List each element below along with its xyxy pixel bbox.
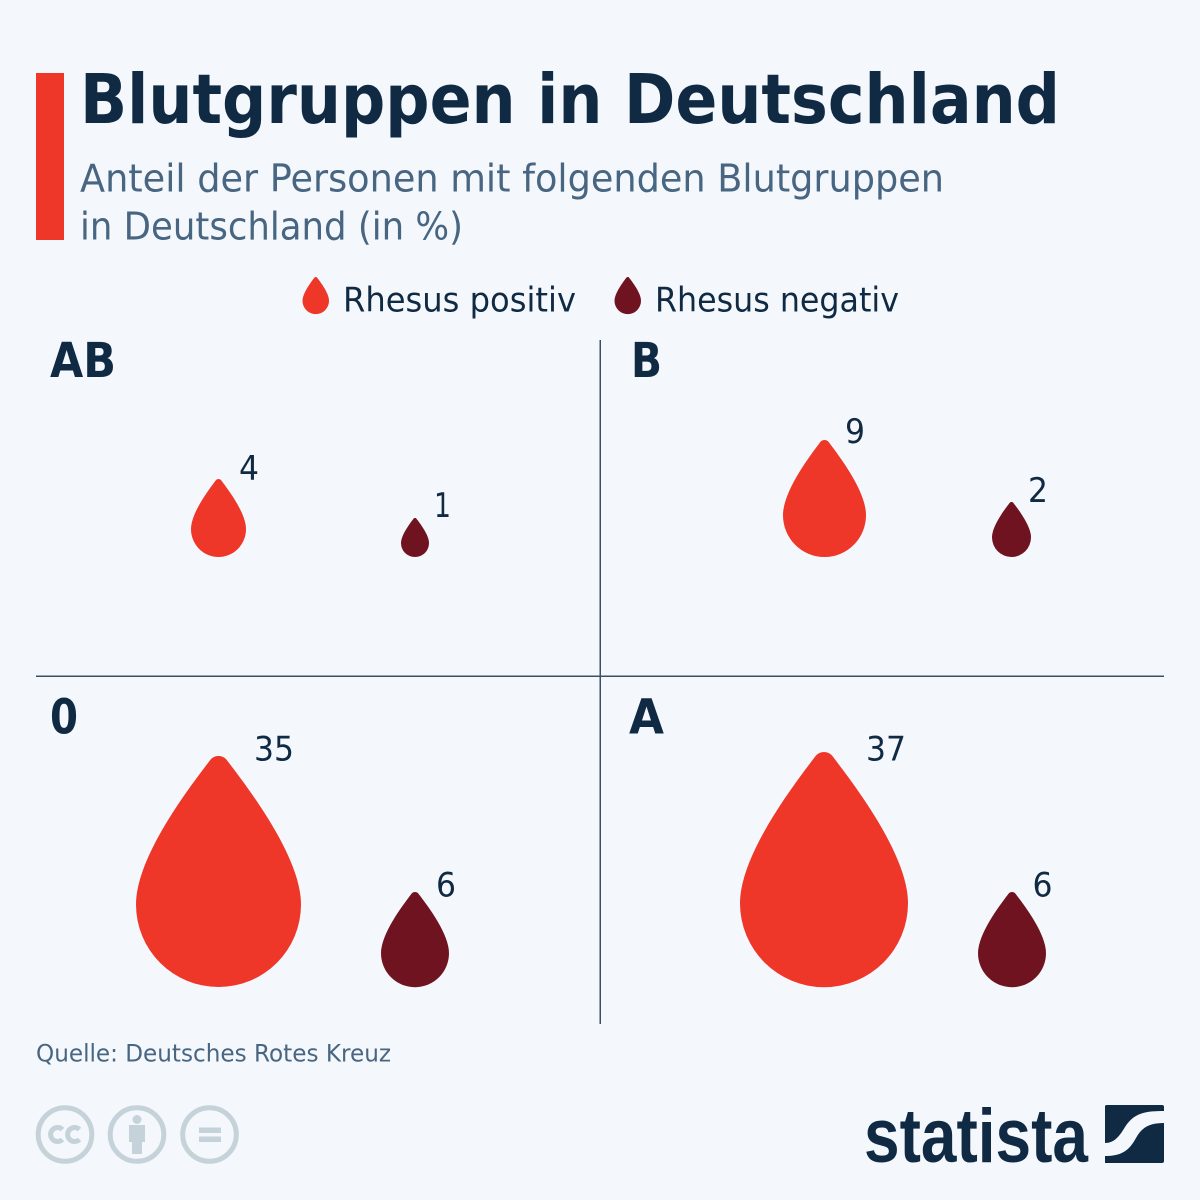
title accent bar [36, 73, 64, 240]
legend label: rhesus positive: Rhesus positiv [343, 280, 576, 320]
logo mark [1105, 1105, 1164, 1163]
subtitle [80, 156, 944, 248]
value: 35: 35 [254, 730, 294, 770]
value: 1: 1 [434, 486, 451, 526]
icon: creative commons [38, 1108, 92, 1161]
heading: 0: 0 [50, 690, 78, 746]
drop: A negative [978, 892, 1046, 987]
icon: attribution [110, 1108, 164, 1161]
panel: A [629, 690, 1052, 987]
drop: AB negative [401, 518, 429, 557]
drop: B negative [992, 502, 1031, 557]
drop: 0 positive [136, 756, 301, 987]
icon: no derivatives [183, 1108, 236, 1161]
logo wordmark: statista [864, 1094, 1089, 1179]
value: 2: 2 [1028, 471, 1048, 511]
subtitle: Anteil der Personen mit folgenden Blutgruppen [80, 156, 944, 200]
value: 6: 6 [436, 866, 456, 906]
legend label: rhesus negative: Rhesus negativ [655, 280, 899, 320]
value: 4: 4 [239, 449, 259, 489]
panel: B [631, 333, 1048, 557]
heading: AB: AB [50, 333, 116, 389]
drop: 0 negative [381, 892, 449, 987]
panel: 0 [50, 690, 456, 987]
drop: AB positive [191, 479, 246, 557]
panel: AB [50, 333, 451, 557]
value: 6: 6 [1032, 866, 1052, 906]
source: Quelle: Deutsches Rotes Kreuz [36, 1040, 391, 1068]
heading: B: B [631, 333, 662, 389]
legend icon: rhesus positive [302, 277, 329, 314]
legend [302, 277, 899, 320]
title: Blutgruppen in Deutschland [80, 60, 1060, 140]
legend icon: rhesus negative [614, 277, 641, 314]
value: 37: 37 [866, 730, 906, 770]
subtitle: in Deutschland (in %) [80, 204, 463, 248]
drop: A positive [740, 752, 908, 987]
value: 9: 9 [845, 412, 865, 452]
statista logo [864, 1094, 1164, 1179]
drop: B positive [783, 440, 866, 557]
heading: A: A [629, 690, 664, 746]
